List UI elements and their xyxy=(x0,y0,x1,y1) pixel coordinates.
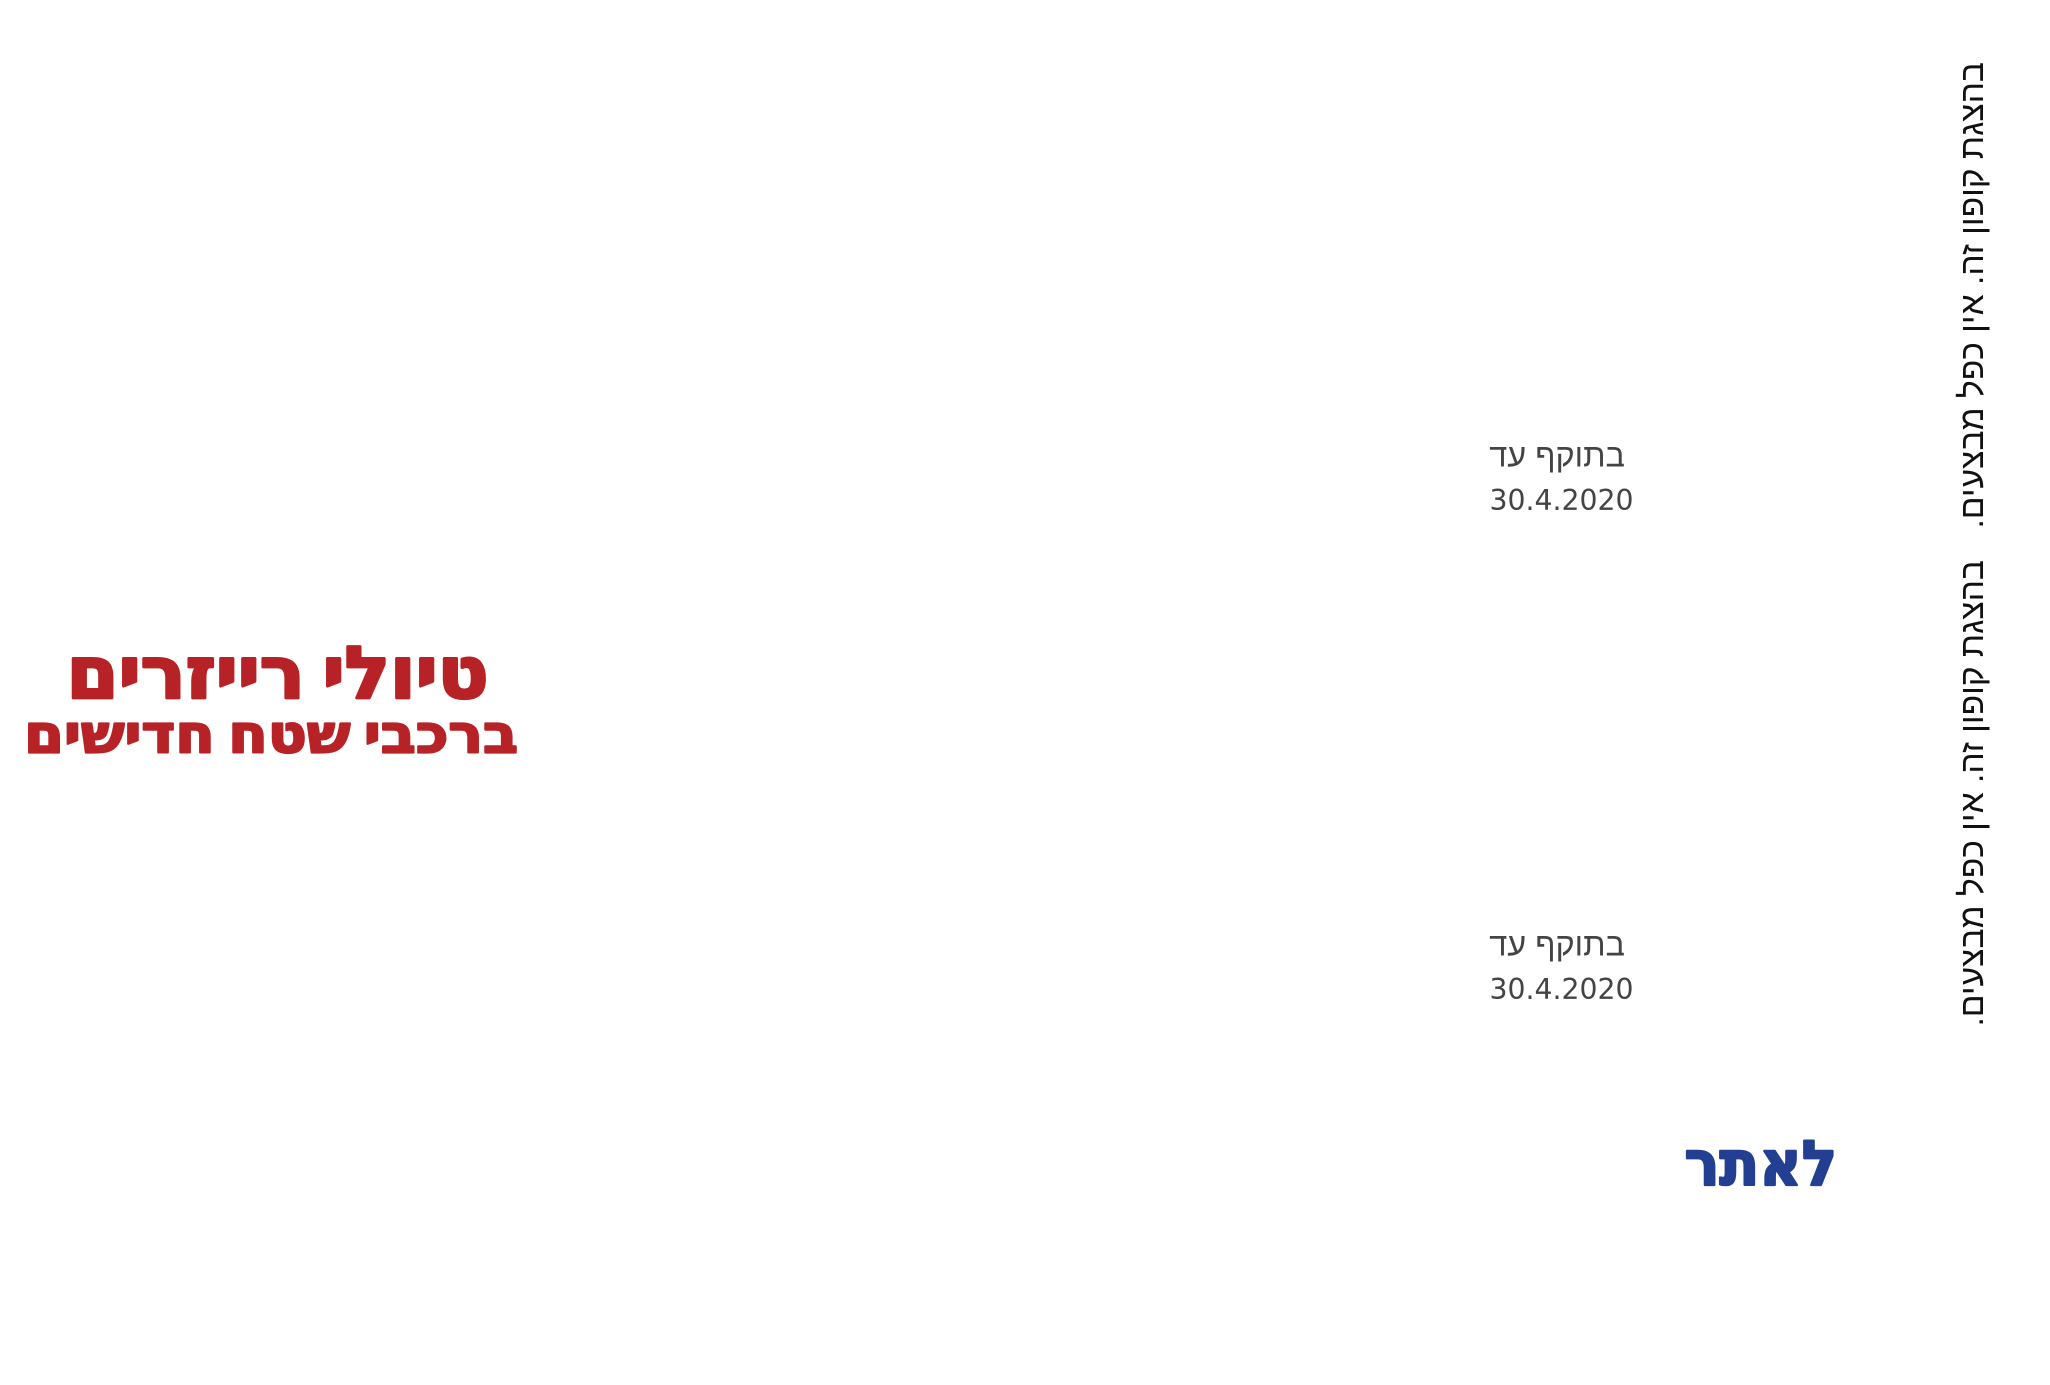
link: to site: לאתר xyxy=(1684,1128,1837,1200)
title: red heading xyxy=(24,632,518,766)
validity note 1 xyxy=(1489,438,1634,517)
validity date 2: 30.4.2020 xyxy=(1490,973,1634,1006)
validity label 1: בתוקף עד xyxy=(1489,438,1625,474)
vertical coupon note 2: בהצגת קופון זה. אין כפל מבצעים. xyxy=(1954,560,1991,1027)
validity date 1: 30.4.2020 xyxy=(1490,484,1634,517)
heading line 2: ברכבי שטח חדישים xyxy=(24,705,518,766)
validity note 2 xyxy=(1489,926,1634,1006)
validity label 2: בתוקף עד xyxy=(1489,926,1625,962)
vertical coupon note 1: בהצגת קופון זה. אין כפל מבצעים. xyxy=(1954,62,1991,529)
heading line 1: טיולי רייזרים xyxy=(66,632,489,716)
